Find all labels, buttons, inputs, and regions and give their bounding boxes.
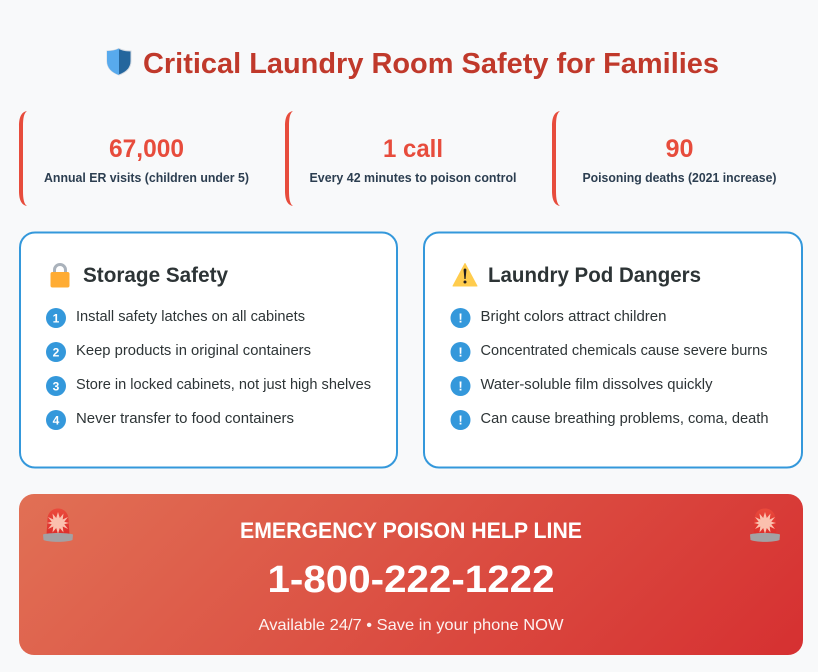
panel: storage safety [20, 232, 397, 468]
item: breathing problems: ! [458, 412, 463, 428]
item: water-soluble film: Water-soluble film dissolves quickly [480, 377, 713, 393]
item 1: Install safety latches on all cabinets [76, 309, 305, 325]
item: concentrated chemicals: ! [458, 344, 463, 360]
item 4: 4 [53, 414, 60, 428]
item: breathing problems: Can cause breathing problems, coma, death [480, 411, 768, 427]
item: bright colors: Bright colors attract children [480, 309, 666, 325]
heading: storage safety: Storage Safety [83, 264, 228, 287]
stat card: poison control calls: 1 call [383, 135, 443, 163]
heading: help line: EMERGENCY POISON HELP LINE [240, 518, 582, 543]
item 3: Store in locked cabinets, not just high shelves [76, 377, 371, 393]
icon: shield [107, 48, 131, 75]
heading: laundry pod dangers: Laundry Pod Dangers [488, 264, 701, 287]
phone number: 1-800-222-1222 [268, 559, 554, 601]
stat card: poison control calls [285, 111, 516, 206]
item 2: 2 [53, 346, 60, 360]
stat card: poisoning deaths: Poisoning deaths (2021 increase) [582, 171, 776, 185]
stat card: ER visits: Annual ER visits (children under 5) [44, 171, 249, 185]
item 1: 1 [53, 312, 60, 326]
stat card: ER visits: 67,000 [109, 135, 184, 163]
availability note: Available 24/7 • Save in your phone NOW [258, 617, 564, 634]
item 4 [46, 410, 294, 430]
panel: laundry pod dangers [424, 232, 802, 468]
panel: emergency help line [19, 494, 803, 655]
item: bright colors: ! [458, 310, 463, 326]
item: water-soluble film [450, 376, 713, 396]
stat card: ER visits [19, 111, 249, 206]
icon: right siren [750, 508, 780, 542]
item 3: 3 [53, 380, 60, 394]
stat card: poisoning deaths [552, 111, 776, 206]
stat card: poisoning deaths: 90 [666, 135, 694, 163]
item 2 [46, 342, 311, 362]
item 4: Never transfer to food containers [76, 411, 294, 427]
stat card: poison control calls: Every 42 minutes to poison control [310, 171, 516, 185]
item 2: Keep products in original containers [76, 343, 311, 359]
title: Critical Laundry Room Safety for Families [143, 48, 719, 80]
item: concentrated chemicals: Concentrated chemicals cause severe burns [480, 343, 768, 359]
item: water-soluble film: ! [458, 378, 463, 394]
icon: warning triangle [453, 264, 477, 286]
item: bright colors [450, 308, 666, 328]
icon: left siren [43, 508, 73, 542]
icon: padlock [50, 264, 70, 288]
